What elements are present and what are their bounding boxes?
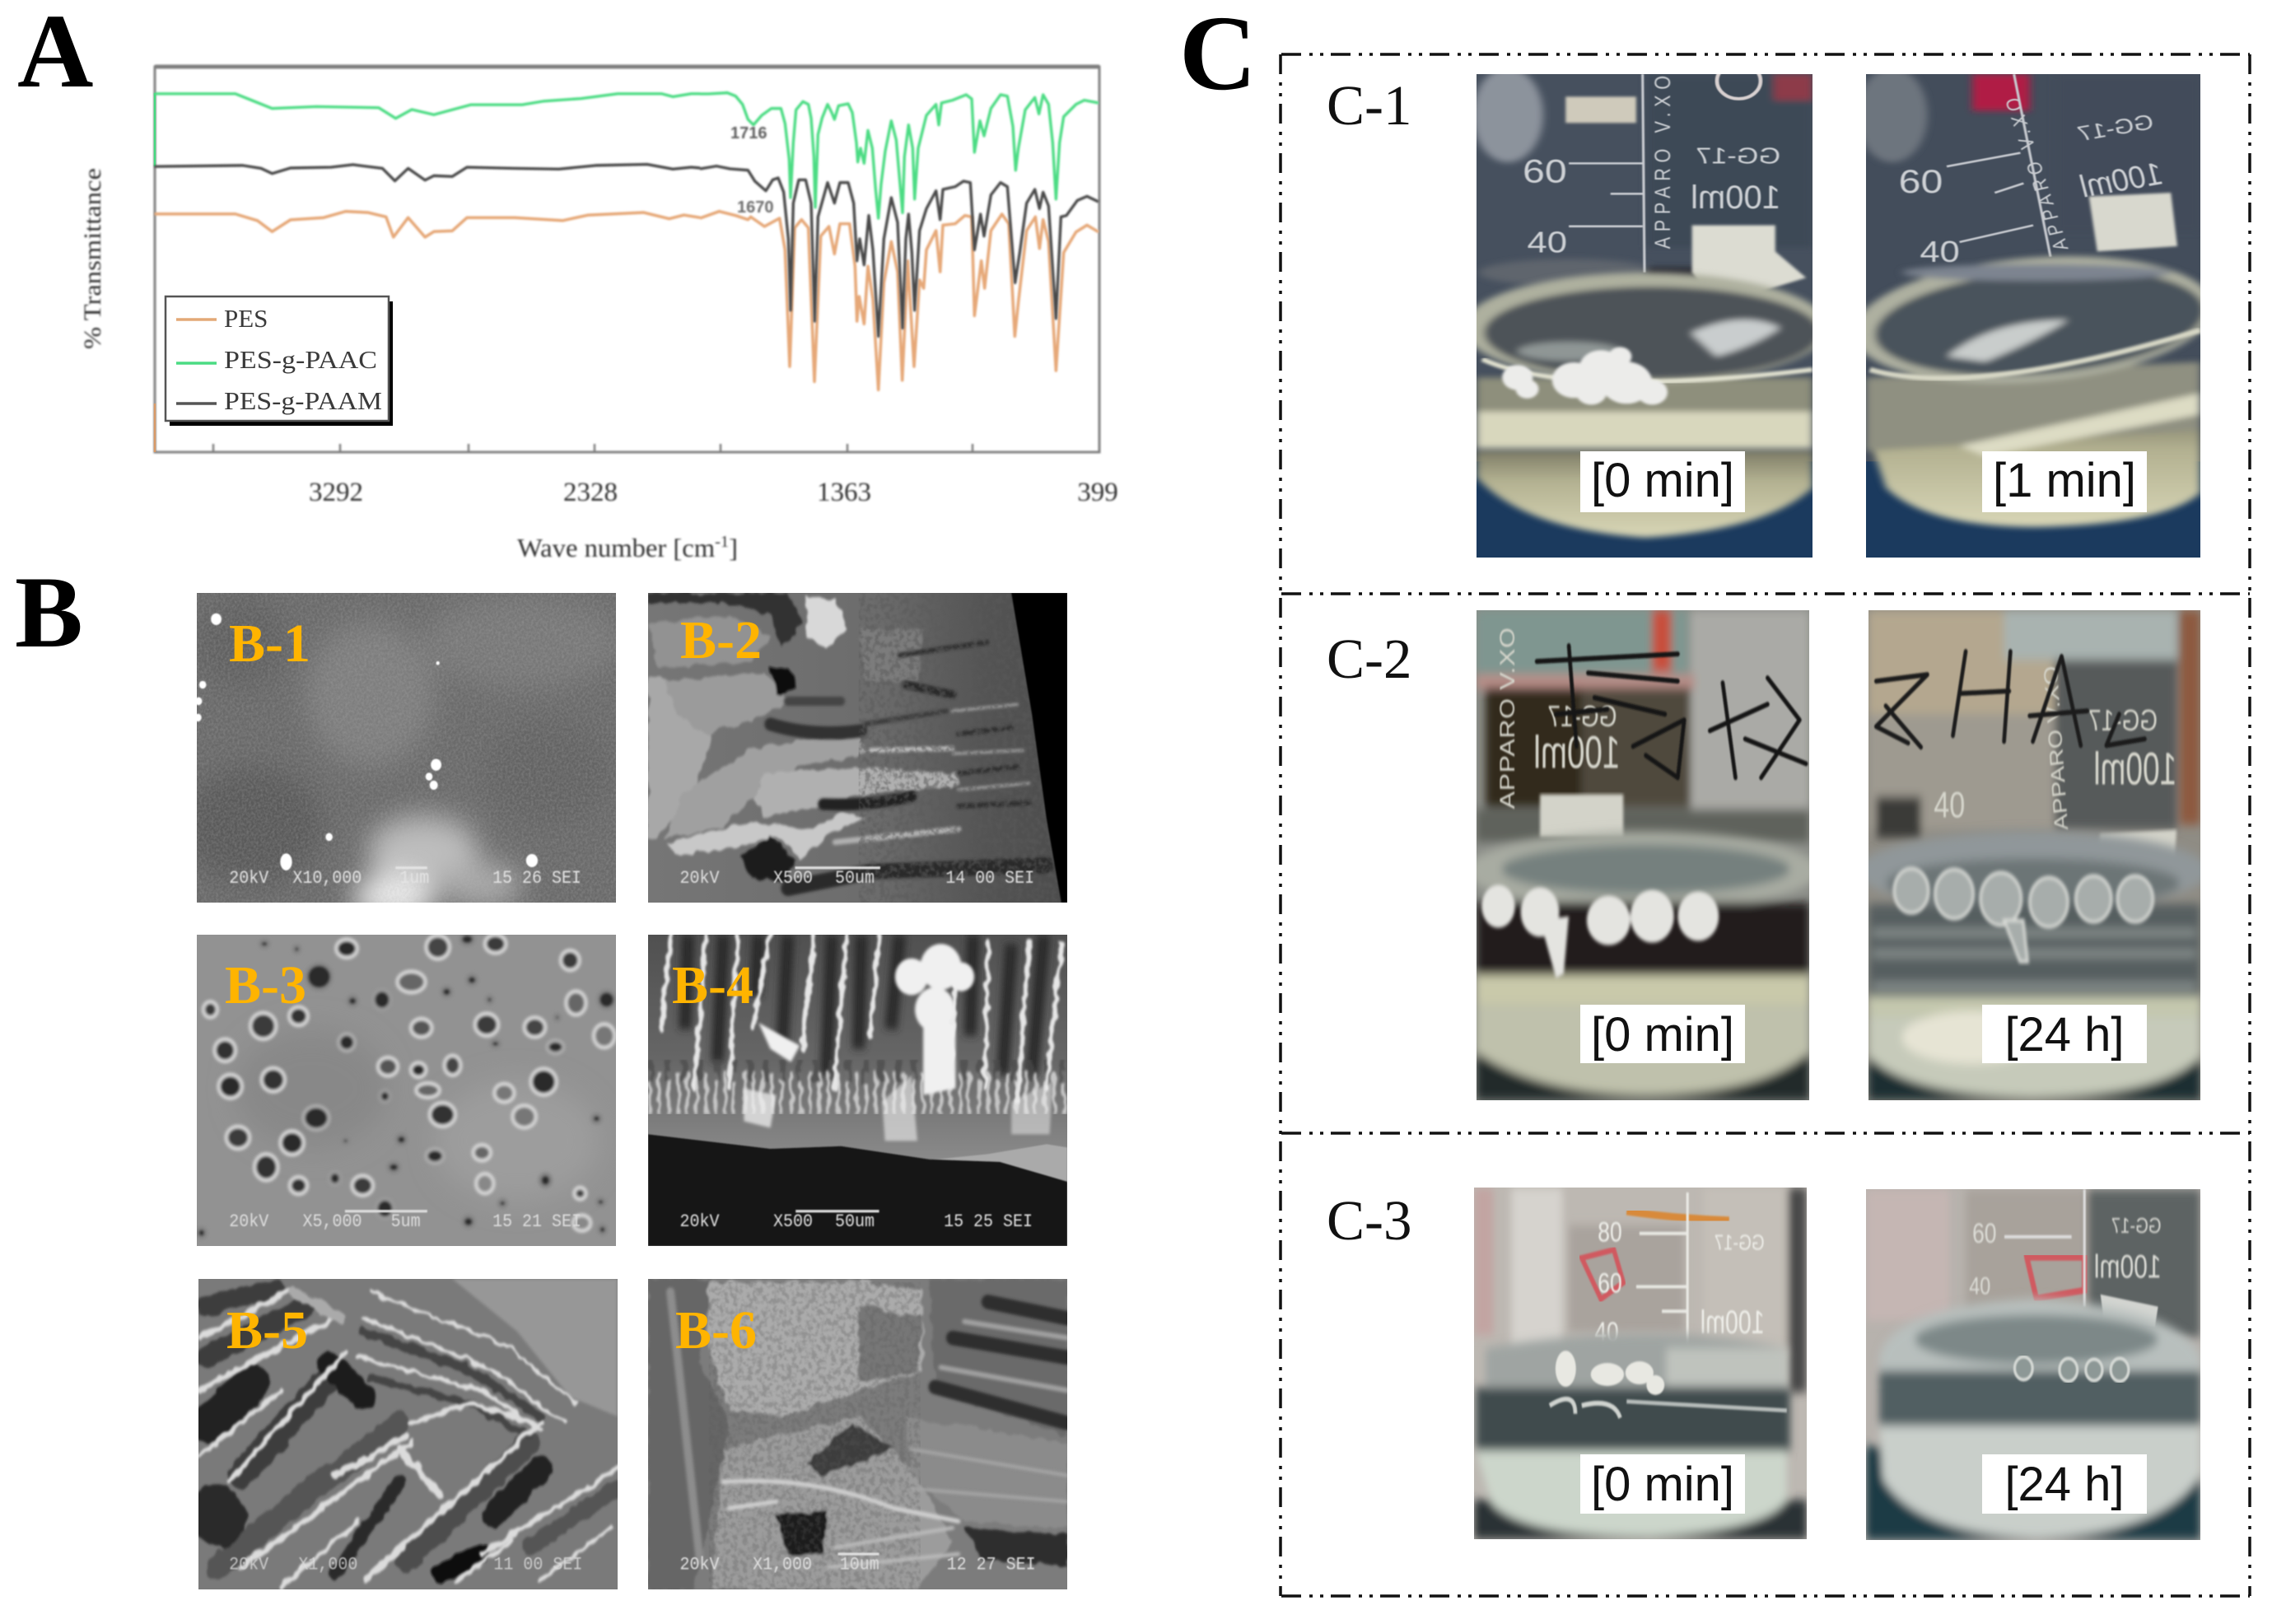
photo: C-1 beaker at 0 min: 100ml — [1691, 180, 1780, 216]
photo: C-3 beaker at 24 h: GG-17 — [2111, 1213, 2162, 1237]
x axis title: ] — [729, 533, 738, 562]
time label: 1 min: [1 min] — [1993, 454, 2136, 507]
panel B-2: SEM image cross-section: X500 — [773, 868, 813, 889]
panel B-6: SEM image rough cross-section: 12 27 SEI — [947, 1554, 1036, 1575]
spectrum: PES — [155, 212, 1099, 390]
panel B-4: SEM image finger-like pores: 50um — [835, 1211, 875, 1232]
panel A: FTIR spectrum chart — [79, 67, 1118, 562]
panel B-4: SEM image finger-like pores: X500 — [773, 1211, 813, 1232]
time label: 24 h — [1982, 1454, 2147, 1514]
time label: 0 min: [0 min] — [1591, 1008, 1734, 1062]
x axis tick labels — [309, 478, 1118, 507]
chart legend — [166, 296, 393, 426]
photo: C-1 beaker at 1 min: APPARO V.XO — [2000, 96, 2073, 253]
panel B-1: SEM image smooth surface: 15 26 SEI — [492, 868, 581, 889]
photo: C-3 beaker at 0 min: 80 — [1598, 1218, 1622, 1248]
time label: 0 min: [0 min] — [1591, 454, 1734, 507]
photo: C-3 beaker at 24 h: 40 — [1969, 1272, 1990, 1300]
heading C-1: C-1 — [1327, 74, 1411, 137]
label B-3: B-3 — [225, 955, 306, 1015]
label B-4: B-4 — [672, 955, 753, 1015]
photo: C-2 beaker at 0 min: GG-17 — [1547, 700, 1617, 733]
x axis title: -1 — [715, 533, 729, 551]
panel B-1: SEM image smooth surface: 20kV — [229, 868, 268, 889]
photo: C-2 beaker at 24 h: 40 — [1934, 785, 1965, 825]
photo: C-3 beaker at 24 h: 100ml — [2094, 1248, 2162, 1286]
photo: C-2 beaker at 24 h — [1857, 610, 2209, 1100]
time label: 24 h: [24 h] — [2004, 1458, 2125, 1511]
photo: C-3 beaker at 0 min: GG-17 — [1714, 1230, 1765, 1254]
x axis title: Wave number [cm — [517, 533, 711, 562]
panel B-2: SEM image cross-section: 50um — [835, 868, 875, 889]
photo: C-1 beaker at 1 min: GG-17 — [2075, 110, 2156, 147]
photo: C-1 beaker at 1 min: 60 — [1899, 164, 1943, 200]
spectrum: PES-g-PAAM — [155, 165, 1099, 336]
time label: 24 h: [24 h] — [2004, 1008, 2125, 1062]
x axis tick labels: 3292 — [309, 478, 363, 507]
x axis tick labels: 399 — [1077, 478, 1118, 507]
photo: C-1 beaker at 0 min: APPARO V.XO — [1651, 76, 1676, 249]
photo: C-3 beaker at 0 min: 100ml — [1701, 1304, 1765, 1341]
left axis coloured starts — [154, 93, 156, 452]
x axis tick labels: 2328 — [563, 478, 618, 507]
time label: 0 min: [0 min] — [1591, 1458, 1734, 1511]
photo: C-2 beaker at 24 h: 100ml — [2093, 743, 2176, 795]
photo: C-3 beaker at 0 min: 40 — [1594, 1318, 1619, 1348]
photo: C-1 beaker at 1 min: 100ml — [2076, 156, 2167, 205]
panel C frame: dash-dot boxes — [1281, 54, 2250, 1596]
panel B-3: SEM image porous surface: X5,000 — [302, 1211, 362, 1232]
photo: C-3 beaker at 24 h: 60 — [1972, 1218, 1997, 1249]
photo: C-2 beaker at 0 min: 100ml — [1533, 726, 1620, 778]
x axis tick labels: 1363 — [817, 478, 871, 507]
photo: C-1 beaker at 0 min: 40 — [1528, 226, 1567, 259]
panel B-1: SEM image smooth surface — [182, 593, 623, 921]
panel B-3: SEM image porous surface: 15 21 SEI — [492, 1211, 581, 1232]
chart legend: PES-g-PAAC — [224, 345, 377, 374]
label B-6: B-6 — [675, 1300, 757, 1360]
peak annotation 1670: 1670 — [737, 198, 774, 217]
photo: C-3 beaker at 24 h — [1866, 1189, 2200, 1540]
photo: C-1 beaker at 1 min: 40 — [1920, 236, 1960, 268]
panel B-5: SEM image layered cross-section: 20kV — [229, 1554, 268, 1575]
heading C-3: C-3 — [1327, 1189, 1411, 1252]
panel B-1: SEM image smooth surface: 1um — [399, 868, 429, 889]
panel B-3: SEM image porous surface: 5um — [391, 1211, 421, 1232]
chart legend: PES-g-PAAM — [224, 386, 382, 415]
chart frame and axis ticks — [155, 67, 1099, 452]
heading C-2: C-2 — [1327, 628, 1411, 690]
photo: C-2 beaker at 0 min — [1467, 610, 1819, 1100]
photo: C-2 beaker at 0 min: APPARO V.XO — [1496, 628, 1519, 809]
panel B-2: SEM image cross-section: 14 00 SEI — [945, 868, 1034, 889]
label B-5: B-5 — [226, 1300, 308, 1360]
panel B-3: SEM image porous surface: 20kV — [229, 1211, 269, 1232]
panel B-4: SEM image finger-like pores: 20kV — [680, 1211, 720, 1232]
spectrum: PES-g-PAAC — [155, 93, 1099, 218]
panel B-6: SEM image rough cross-section: 20kV — [680, 1554, 720, 1575]
panel B-4: SEM image finger-like pores — [648, 935, 1067, 1246]
photo: C-1 beaker at 0 min: 60 — [1523, 153, 1567, 189]
panel B-1: SEM image smooth surface: X10,000 — [292, 868, 362, 889]
photo: C-3 beaker at 0 min: 60 — [1598, 1268, 1622, 1299]
photo: C-3 beaker at 0 min — [1474, 1188, 1807, 1539]
photo: C-2 beaker at 24 h: GG-17 — [2088, 704, 2158, 737]
panel B-5: SEM image layered cross-section: X1,000 — [298, 1554, 357, 1575]
panel B-2: SEM image cross-section: 20kV — [680, 868, 720, 889]
panel B-5: SEM image layered cross-section — [198, 1279, 618, 1589]
panel B-6: SEM image rough cross-section — [648, 1279, 1067, 1590]
y axis title: % Transmittance — [79, 168, 106, 349]
panel B-4: SEM image finger-like pores: 15 25 SEI — [944, 1211, 1033, 1232]
label B-2: B-2 — [680, 610, 762, 670]
photo: C-2 beaker at 24 h: APPARO V.XO — [2040, 665, 2072, 832]
photo: C-1 beaker at 0 min: GG-17 — [1696, 142, 1780, 169]
panel B-3: SEM image porous surface — [197, 933, 616, 1246]
photo: C-1 beaker at 0 min — [1463, 63, 1828, 558]
chart legend: PES — [224, 304, 268, 333]
panel label: B: B — [15, 556, 83, 669]
panel B-6: SEM image rough cross-section: 10um — [840, 1554, 879, 1575]
panel B-2: SEM image cross-section — [648, 593, 1067, 903]
peak annotation 1716: 1716 — [730, 124, 767, 142]
panel B-5: SEM image layered cross-section: 11 00 SEI — [493, 1554, 582, 1575]
time label: 24 h — [1982, 1005, 2147, 1063]
label B-1: B-1 — [229, 614, 310, 674]
photo: C-1 beaker at 1 min — [1845, 68, 2221, 558]
panel B-6: SEM image rough cross-section: X1,000 — [753, 1554, 812, 1575]
